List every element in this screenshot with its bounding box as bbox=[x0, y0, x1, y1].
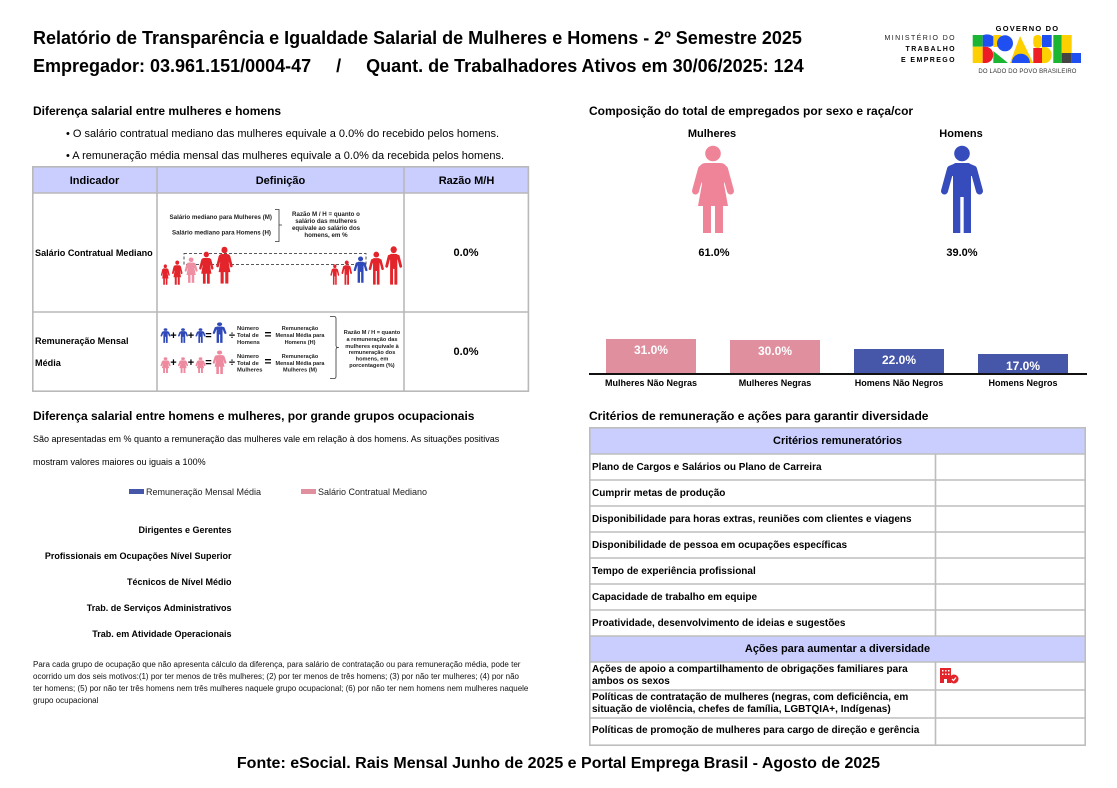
row label: remuneração: Média bbox=[35, 358, 61, 368]
definition diagram: remuneração média: Número bbox=[237, 354, 259, 360]
heading: critérios: Critérios de remuneração e ações para garantir diversidade bbox=[589, 409, 928, 423]
definition diagram: remuneração média: + bbox=[170, 357, 177, 369]
row label: remuneração: Remuneração Mensal bbox=[35, 336, 128, 346]
panel: criteria table bbox=[589, 427, 1086, 746]
icon: woman bbox=[692, 146, 734, 233]
definition diagram: salário mediano: Salário mediano para Mulheres (M) bbox=[170, 214, 272, 221]
heading: grupos ocupacionais: Diferença salarial entre homens e mulheres, por grande grupos ocupacionais bbox=[33, 409, 474, 423]
action: Ações de apoio a compartilhamento de obrigações familiares para bbox=[592, 664, 908, 675]
axis label: Homens Negros bbox=[988, 378, 1058, 388]
logo: governo do brasil: GOVERNO DO bbox=[996, 24, 1059, 33]
definition diagram: remuneração média: Total de bbox=[237, 361, 260, 367]
occupational group label: Dirigentes e Gerentes bbox=[138, 525, 232, 535]
criterion: Cumprir metas de produção bbox=[592, 488, 725, 499]
criterion: Disponibilidade para horas extras, reuniões com clientes e viagens bbox=[592, 514, 912, 525]
header band: ações: Ações para aumentar a diversidade bbox=[745, 643, 930, 655]
row label: salário: Salário Contratual Mediano bbox=[35, 248, 153, 258]
criterion: Proatividade, desenvolvimento de ideias e sugestões bbox=[592, 618, 845, 629]
axis label: Homens Não Negros bbox=[855, 378, 943, 388]
definition diagram: remuneração média: homens, em bbox=[356, 356, 388, 362]
employer line: Empregador: 03.961.151/0004-47 / Quant. de Trabalhadores Ativos em 30/06/2025: 124 bbox=[33, 56, 804, 76]
action: Políticas de promoção de mulheres para cargo de direção e gerência bbox=[592, 725, 919, 736]
icon: man bbox=[941, 146, 983, 233]
definition diagram: salário mediano bbox=[160, 209, 402, 285]
action: Políticas de contratação de mulheres (negras, com deficiência, em bbox=[592, 692, 908, 703]
definition diagram: remuneração média: Mulheres (M) bbox=[283, 368, 317, 374]
bar: homens negros: 17.0% bbox=[1006, 359, 1040, 373]
panel: indicator table bbox=[32, 166, 530, 392]
definition diagram: remuneração média bbox=[160, 316, 401, 379]
footnote: Para cada grupo de ocupação que não apresenta cálculo da diferença, para salário de contratação ou para remuneração média, pode ter bbox=[33, 660, 520, 669]
action bbox=[592, 692, 908, 715]
definition diagram: remuneração média: Homens bbox=[237, 340, 260, 346]
criterion: Capacidade de trabalho em equipe bbox=[592, 592, 757, 603]
definition diagram: remuneração média: + bbox=[188, 357, 194, 369]
criterion: Tempo de experiência profissional bbox=[592, 566, 756, 577]
description text bbox=[33, 434, 499, 467]
label: mulheres: Mulheres bbox=[688, 128, 736, 140]
icon: building with check bbox=[940, 668, 958, 684]
heading: composição: Composição do total de empregados por sexo e raça/cor bbox=[589, 104, 913, 118]
table grid bbox=[589, 427, 1086, 746]
definition diagram: remuneração média: mulheres equivale à bbox=[345, 344, 400, 350]
axis label: Mulheres Não Negras bbox=[605, 378, 697, 388]
definition diagram: remuneração média: a remuneração das bbox=[346, 337, 398, 343]
bullet text 2: • A remuneração média mensal das mulheres equivale a 0.0% da recebida pelos homens. bbox=[66, 150, 504, 162]
definition diagram: remuneração média: + bbox=[188, 330, 194, 342]
header: indicador: Indicador bbox=[70, 175, 119, 187]
footnote: ter homens; (5) por não ter três homens nem três mulheres naquele grupo ocupacional; (6) por não ter nem homens nem mulheres naquele bbox=[33, 684, 528, 693]
footnote: ocorrido um dos seis motivos:(1) por ter menos de três mulheres; (2) por ter menos de três homens; (3) por não ter mulheres; (4) por não bbox=[33, 672, 519, 681]
logo: ministério: MINISTÉRIO DO bbox=[885, 35, 956, 42]
definition diagram: remuneração média: Mensal Média para bbox=[276, 361, 325, 367]
footnote bbox=[33, 660, 528, 705]
definition diagram: remuneração média: Mulheres bbox=[237, 368, 262, 374]
criterion: Plano de Cargos e Salários ou Plano de Carreira bbox=[592, 462, 822, 473]
definition diagram: remuneração média: porcentagem (%) bbox=[349, 363, 395, 369]
definition diagram: remuneração média: Número bbox=[237, 326, 259, 332]
description text: São apresentadas em % quanto a remuneração das mulheres vale em relação à dos homens. As situações positivas bbox=[33, 434, 499, 444]
definition diagram: remuneração média: remuneração dos bbox=[349, 350, 395, 356]
bar: mulheres não negras: 31.0% bbox=[634, 343, 668, 357]
criterion: Disponibilidade de pessoa em ocupações específicas bbox=[592, 540, 847, 551]
axis label: Mulheres Negras bbox=[739, 378, 811, 388]
header band: ações bbox=[589, 636, 1086, 662]
bullet text 1: • O salário contratual mediano das mulheres equivale a 0.0% do recebido pelos homens. bbox=[66, 128, 499, 140]
value: remuneração: 0.0% bbox=[453, 346, 479, 358]
definition diagram: salário mediano: homens, em % bbox=[304, 232, 348, 239]
row label: remuneração bbox=[35, 336, 128, 368]
bar: mulheres negras: 30.0% bbox=[758, 344, 792, 358]
definition diagram: remuneração média: + bbox=[170, 330, 177, 342]
definition diagram: remuneração média: = bbox=[205, 330, 212, 342]
definition diagram: salário mediano: Salário mediano para Homens (H) bbox=[172, 230, 271, 236]
table grid bbox=[32, 166, 530, 392]
title: Relatório de Transparência e Igualdade Salarial de Mulheres e Homens - 2º Semestre 2025 bbox=[33, 28, 802, 48]
bar: mulheres não negras bbox=[606, 339, 696, 374]
occupational group label: Trab. em Atividade Operacionais bbox=[92, 629, 232, 639]
footnote: grupo ocupacional bbox=[33, 696, 98, 705]
action: ambos os sexos bbox=[592, 676, 670, 687]
source footer: Fonte: eSocial. Rais Mensal Junho de 2025 e Portal Emprega Brasil - Agosto de 2025 bbox=[237, 755, 880, 772]
bar: homens não negros: 22.0% bbox=[882, 353, 916, 367]
bar: homens negros bbox=[978, 354, 1068, 374]
logo: ministério bbox=[885, 34, 956, 64]
definition diagram: remuneração média: = bbox=[264, 354, 272, 368]
legend: salário: Salário Contratual Mediano bbox=[318, 487, 427, 497]
logo: ministério: E EMPREGO bbox=[901, 57, 956, 64]
bar: homens não negros bbox=[854, 349, 944, 374]
definition diagram: salário mediano: equivale ao salário dos bbox=[292, 225, 361, 232]
value: mulheres: 61.0% bbox=[698, 247, 730, 259]
definition diagram: remuneração média: Homens (H) bbox=[285, 340, 316, 346]
definition diagram: remuneração média: Mensal Média para bbox=[276, 333, 325, 339]
definition diagram: remuneração média: Remuneração bbox=[282, 326, 319, 332]
bar: mulheres negras bbox=[730, 340, 820, 374]
action: situação de violência, chefes de família, LGBTQIA+, Indígenas) bbox=[592, 704, 891, 715]
heading: diferença salarial: Diferença salarial entre mulheres e homens bbox=[33, 104, 281, 118]
description text: mostram valores maiores ou iguais a 100% bbox=[33, 456, 206, 466]
definition diagram: remuneração média: = bbox=[205, 357, 212, 369]
definition diagram: salário mediano: salário das mulheres bbox=[295, 218, 357, 225]
legend bbox=[129, 487, 427, 497]
header band: critérios bbox=[589, 427, 1086, 454]
header band: critérios: Critérios remuneratórios bbox=[773, 435, 902, 447]
occupational group label: Técnicos de Nível Médio bbox=[127, 577, 232, 587]
legend: remuneração: Remuneração Mensal Média bbox=[146, 487, 261, 497]
header: razão: Razão M/H bbox=[439, 175, 494, 187]
logo: governo do brasil bbox=[972, 24, 1081, 75]
header: definição: Definição bbox=[256, 175, 305, 187]
definition diagram: remuneração média: Remuneração bbox=[282, 354, 319, 360]
action bbox=[592, 664, 908, 687]
bar chart: raça/cor bbox=[589, 339, 1087, 388]
logo: governo do brasil: DO LADO DO POVO BRASILEIRO bbox=[978, 69, 1077, 75]
definition diagram: remuneração média: Razão M / H = quanto bbox=[344, 330, 401, 336]
definition diagram: remuneração média: ÷ bbox=[229, 330, 235, 342]
occupational group label: Profissionais em Ocupações Nível Superior bbox=[45, 551, 232, 561]
table header background bbox=[32, 166, 529, 193]
occupational group label: Trab. de Serviços Administrativos bbox=[87, 603, 232, 613]
logo: ministério: TRABALHO bbox=[906, 46, 956, 53]
definition diagram: remuneração média: = bbox=[264, 328, 272, 342]
definition diagram: salário mediano: Razão M / H = quanto o bbox=[292, 211, 360, 218]
baseline axis bbox=[589, 373, 1087, 375]
definition diagram: remuneração média: ÷ bbox=[229, 357, 235, 369]
value: homens: 39.0% bbox=[946, 247, 978, 259]
value: salário: 0.0% bbox=[453, 247, 479, 259]
definition diagram: remuneração média: Total de bbox=[237, 333, 260, 339]
label: homens: Homens bbox=[939, 128, 983, 140]
